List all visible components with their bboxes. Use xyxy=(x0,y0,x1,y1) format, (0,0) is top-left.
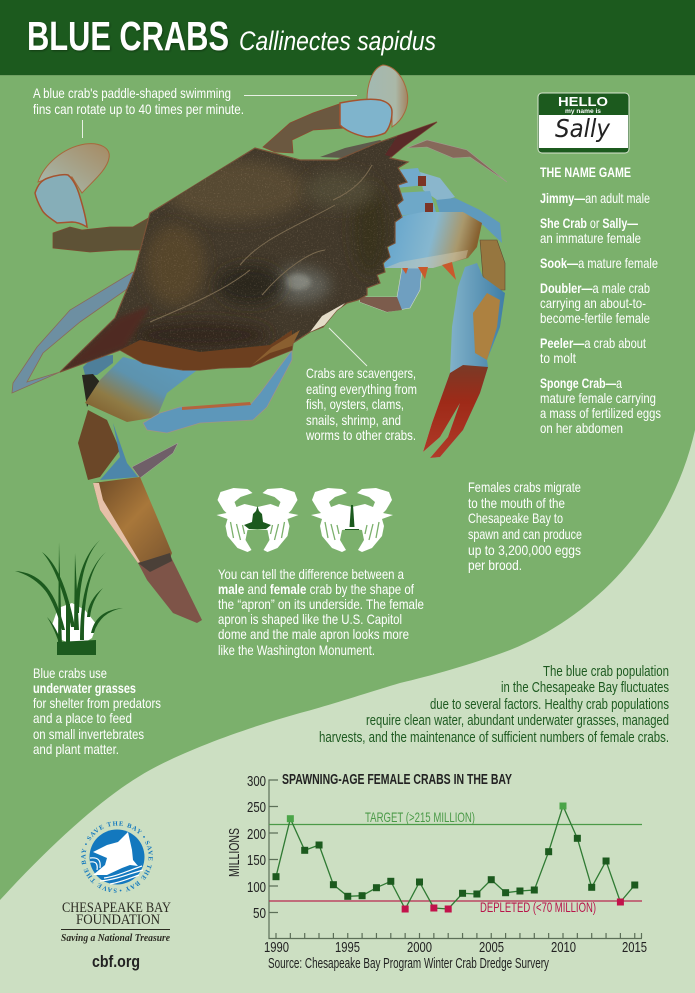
text block: female migration xyxy=(468,479,582,573)
big right blue segment xyxy=(383,212,482,268)
text block: underwater grasses: on small invertebrates xyxy=(33,726,144,742)
depleted line xyxy=(269,900,642,902)
left blue segment xyxy=(83,355,113,375)
y axis labels: 300 xyxy=(247,774,266,790)
callout: scavengers xyxy=(305,328,417,443)
text block: female migration: up to 3,200,000 eggs xyxy=(468,542,581,558)
y axis labels xyxy=(247,774,266,922)
y axis labels: 50 xyxy=(253,906,266,922)
icon: underwater grass with crab xyxy=(15,540,123,655)
y axis labels: 150 xyxy=(247,853,266,869)
text block: female migration: Females crabs migrate xyxy=(468,479,581,495)
target line xyxy=(269,824,642,826)
lower right leg xyxy=(360,268,422,312)
text block: the name game: Peeler—a crab about xyxy=(540,335,646,351)
text block: apron difference: the “apron” on its underside. The female xyxy=(218,596,424,612)
text block: the name game: an immature female xyxy=(540,230,641,246)
axes xyxy=(269,780,642,938)
text block: population xyxy=(319,664,669,746)
text block: the name game: Sponge Crab—a xyxy=(540,375,622,391)
callout: swimming fins: fins can rotate up to 40 times per minute. xyxy=(33,101,244,117)
x axis labels: 2015 xyxy=(622,940,647,956)
upper right paddle leg xyxy=(263,65,408,158)
text block: underwater grasses: and plant matter. xyxy=(33,741,119,757)
right blue walking legs xyxy=(396,168,502,243)
logo: Chesapeake Bay Foundation: CHESAPEAKE BAY xyxy=(62,900,171,916)
left claw xyxy=(93,477,202,623)
left spine xyxy=(132,443,178,478)
y axis labels: 100 xyxy=(247,880,266,896)
logo: Chesapeake Bay Foundation: FOUNDATION xyxy=(76,912,160,928)
text block: apron difference: like the Washington Monument. xyxy=(218,642,375,658)
callout: scavengers: snails, shrimp, and xyxy=(306,412,401,428)
text block: female migration: Chesapeake Bay to xyxy=(468,510,563,526)
text block: the name game: Jimmy—an adult male xyxy=(540,190,650,206)
y axis labels: 200 xyxy=(247,827,266,843)
text block: female migration: to the mouth of the xyxy=(468,495,565,511)
text block: underwater grasses: for shelter from predators xyxy=(33,695,161,711)
y axis labels: 250 xyxy=(247,800,266,816)
left long leg xyxy=(12,272,140,393)
text block: apron difference: male and female crab by the shape of xyxy=(218,581,414,597)
depleted label: DEPLETED (<70 MILLION) xyxy=(480,899,596,915)
text block: the name game: mature female carrying xyxy=(540,390,656,406)
text block: the name game: become-fertile female xyxy=(540,310,650,326)
right claw xyxy=(423,263,505,458)
name tag: hello my name is Sally: HELLO xyxy=(558,94,608,109)
x axis labels: 2005 xyxy=(479,940,504,956)
text block: underwater grasses: Blue crabs use xyxy=(33,665,107,681)
scientific name: Callinectes sapidus xyxy=(239,26,436,56)
text block: apron difference: You can tell the difference between a xyxy=(218,566,404,582)
x axis labels: 1990 xyxy=(264,940,289,956)
website: cbf.org xyxy=(92,952,140,971)
x axis labels: 2010 xyxy=(551,940,576,956)
text block: underwater grasses: underwater grasses xyxy=(33,680,136,696)
text block: the name game: Sook—a mature female xyxy=(540,255,658,271)
name tag: hello my name is Sally: Sally xyxy=(555,114,611,143)
text block: underwater grasses: and a place to feed xyxy=(33,710,132,726)
data line xyxy=(276,806,635,909)
logo: Chesapeake Bay Foundation: Saving a National Treasure xyxy=(61,933,170,944)
callout: scavengers: fish, oysters, clams, xyxy=(306,396,404,412)
orange leg spikes xyxy=(402,262,456,280)
logo: Chesapeake Bay Foundation xyxy=(61,821,171,971)
text block: apron difference: apron is shaped like the U.S. Capitol xyxy=(218,611,402,627)
lower left leg xyxy=(143,350,292,433)
logo: Chesapeake Bay Foundation: SAVE THE BAY • SAVE THE BAY • SAVE THE BAY • xyxy=(81,821,153,893)
line chart: spawning-age female crabs xyxy=(227,772,647,972)
callout: swimming fins: A blue crab's paddle-shaped swimming xyxy=(33,85,231,101)
icon: male crab with monument apron xyxy=(311,488,393,552)
text block: the name game: a mass of fertilized eggs xyxy=(540,405,661,421)
y axis title: MILLIONS xyxy=(227,828,243,877)
carapace xyxy=(60,120,440,375)
text block: female migration: spawn and can produce xyxy=(468,526,582,542)
text block: the name game xyxy=(540,164,661,436)
icon: female crab with capitol apron xyxy=(216,488,298,552)
name tag: hello my name is Sally: my name is xyxy=(565,108,601,115)
background: pale green wave xyxy=(0,430,695,993)
callout: scavengers: Crabs are scavengers, xyxy=(306,365,416,381)
target label: TARGET (>215 MILLION) xyxy=(365,809,475,825)
right swimming spine leg xyxy=(407,140,507,182)
x axis labels: 2000 xyxy=(407,940,432,956)
text block: the name game: carrying an about-to- xyxy=(540,295,646,311)
callout: swimming fins xyxy=(33,85,357,138)
source note: Source: Chesapeake Bay Program Winter Crab Dredge Survery xyxy=(268,956,550,972)
left carpus xyxy=(78,410,120,480)
text block: the name game: Doubler—a male crab xyxy=(540,280,650,296)
leader lines xyxy=(82,96,357,138)
right carpus xyxy=(480,240,505,290)
header band xyxy=(0,0,695,76)
title: BLUE CRABS xyxy=(27,13,229,59)
callout: scavengers: worms to other crabs. xyxy=(305,427,416,443)
name tag: hello my name is Sally xyxy=(538,93,629,153)
text block: underwater grasses xyxy=(33,665,161,757)
text block: apron difference xyxy=(218,566,424,658)
text block: apron difference: dome and the male apron looks more xyxy=(218,626,409,642)
text block: the name game: THE NAME GAME xyxy=(540,164,631,180)
data points xyxy=(272,802,638,912)
x axis labels: 1995 xyxy=(335,940,360,956)
callout: scavengers: eating everything from xyxy=(306,381,417,397)
x axis labels xyxy=(264,940,647,956)
leader line xyxy=(329,328,367,366)
text block: the name game: She Crab or Sally— xyxy=(540,215,638,231)
text block: the name game: to molt xyxy=(540,350,576,366)
upper left paddle leg xyxy=(35,144,167,252)
crab photo illustration xyxy=(12,65,507,623)
chart title: SPAWNING-AGE FEMALE CRABS IN THE BAY xyxy=(282,772,512,788)
text block: female migration: per brood. xyxy=(468,557,522,573)
text block: the name game: on her abdomen xyxy=(540,420,623,436)
